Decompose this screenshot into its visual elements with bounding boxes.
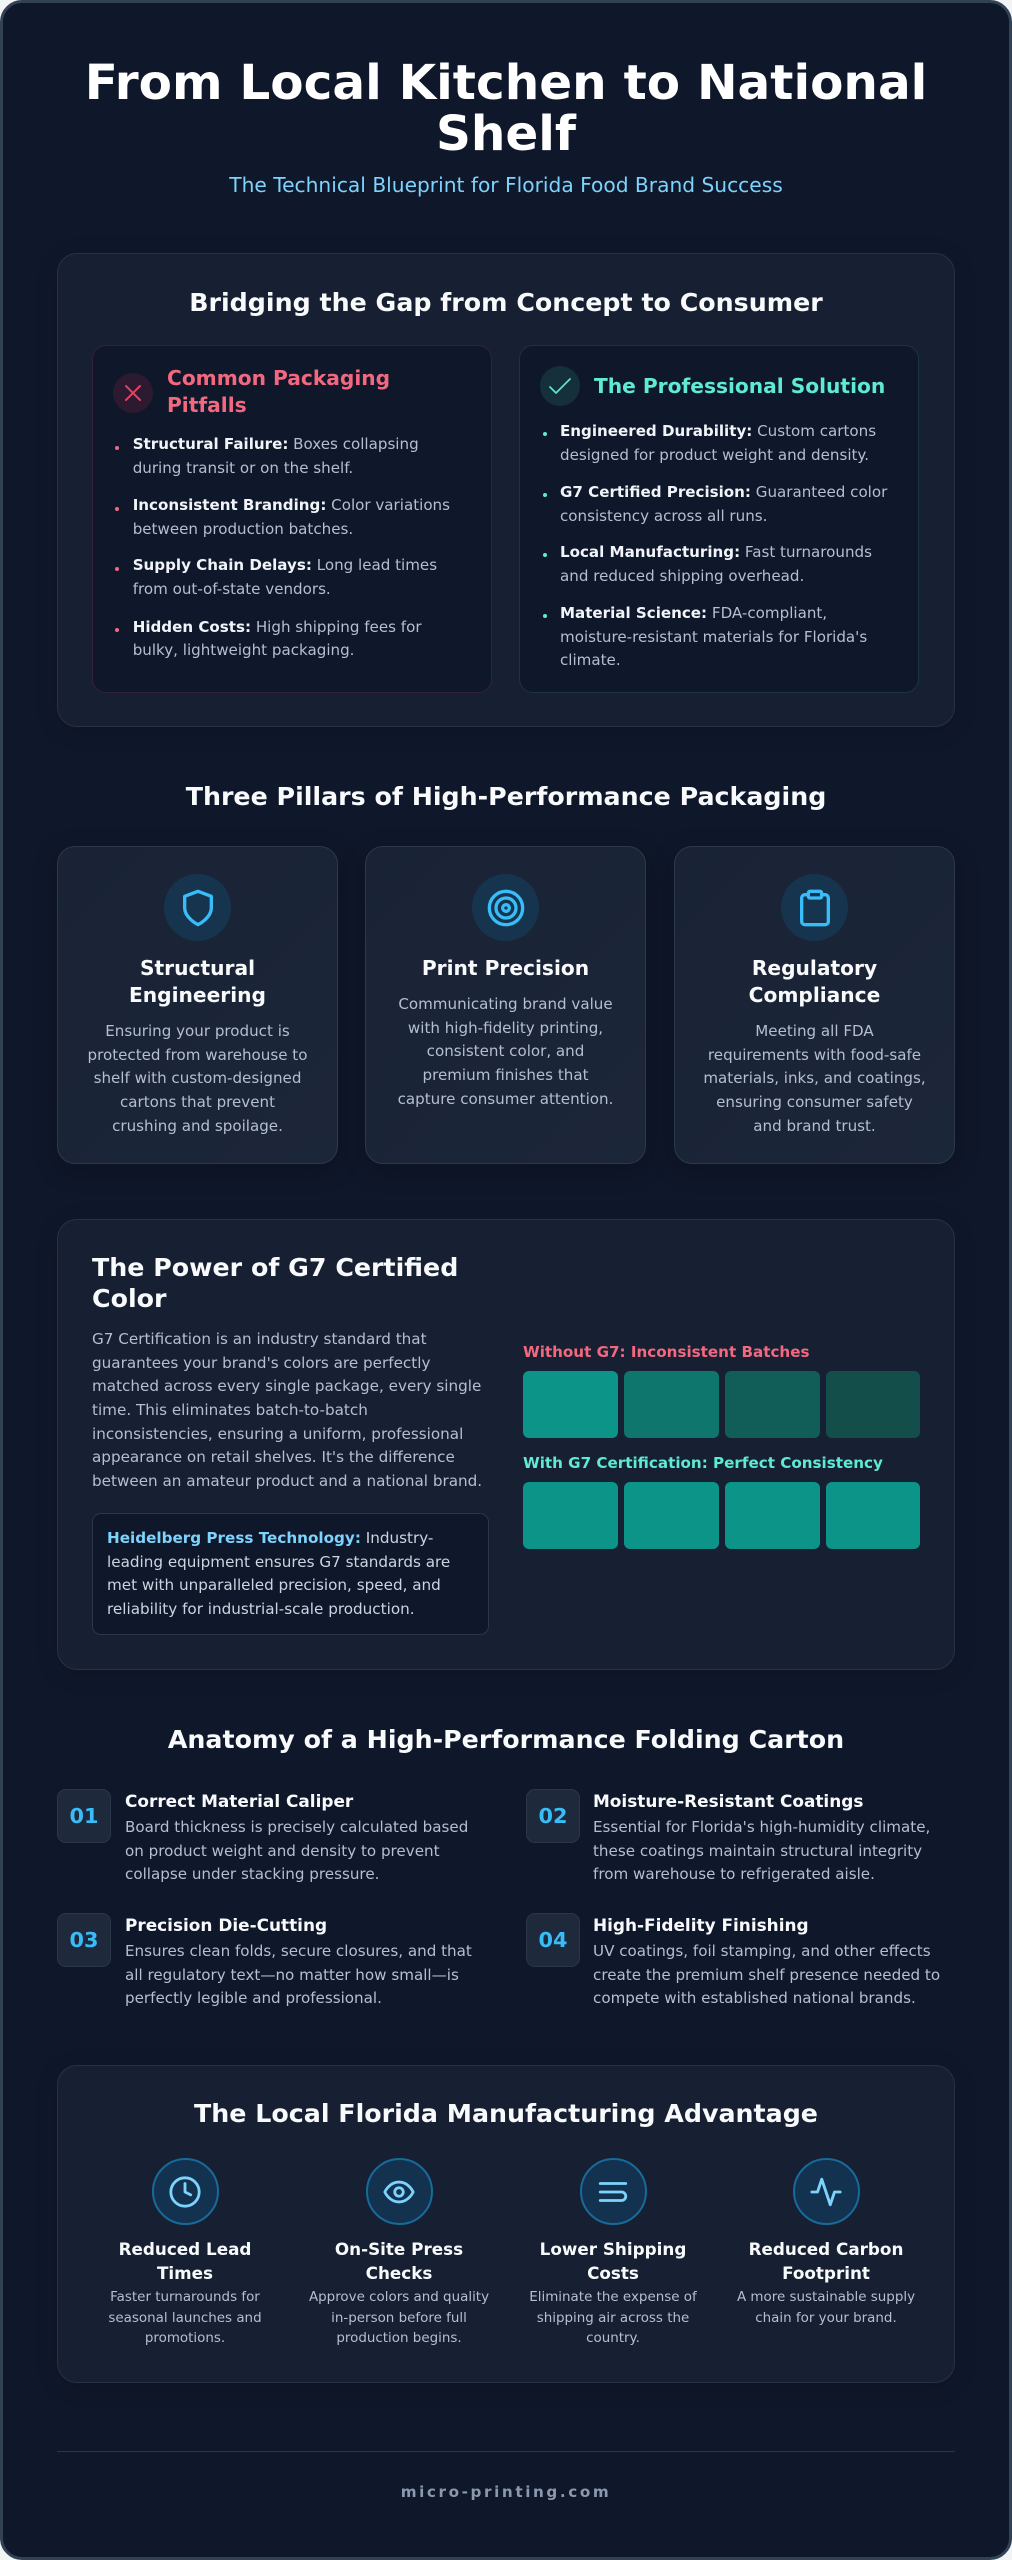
step text: these coatings maintain structural integrity <box>593 1842 922 1860</box>
step text: compete with established national brands. <box>593 1989 916 2007</box>
card text: protected from warehouse to <box>88 1046 307 1064</box>
step text: Essential for Florida's high-humidity climate, <box>593 1818 930 1836</box>
benefit text: chain for your brand. <box>755 2311 897 2326</box>
benefit: shipping costs <box>529 2158 697 2346</box>
heading: solution: The Professional Solution <box>594 374 885 398</box>
step title: High-Fidelity Finishing <box>593 1915 809 1935</box>
heading: g7 <box>92 1253 458 1313</box>
benefit text: Eliminate the expense of <box>529 2290 697 2305</box>
list item: g7 certified precision: consistency across all runs. <box>560 507 767 525</box>
heading: pitfalls <box>167 366 390 417</box>
number badge: 01 <box>70 1804 98 1828</box>
text: g7 description: matched across every single package, every single <box>92 1377 481 1395</box>
number badge: 04 <box>539 1928 567 1952</box>
card text: with high-fidelity printing, <box>408 1019 603 1037</box>
card title <box>129 956 266 1006</box>
list item: structural failure: Structural Failure: Boxes collapsing <box>133 435 419 453</box>
step 03 <box>57 1913 472 2007</box>
benefit title: On-Site Press <box>335 2239 463 2259</box>
benefit title: Costs <box>587 2263 639 2283</box>
title: From Local Kitchen to National <box>85 55 927 111</box>
callout: heidelberg press <box>92 1513 489 1635</box>
panel: florida advantage <box>57 2065 955 2383</box>
list item: g7 certified precision: G7 Certified Precision: Guaranteed color <box>560 483 887 501</box>
benefit title: Footprint <box>782 2263 870 2283</box>
panel: professional solution <box>519 345 919 693</box>
step title: Moisture-Resistant Coatings <box>593 1791 863 1811</box>
benefit title: Reduced Lead <box>119 2239 251 2259</box>
benefit text: country. <box>586 2331 640 2346</box>
number badge <box>526 1789 580 1843</box>
list item: hidden costs: Hidden Costs: High shipping fees for <box>133 618 422 636</box>
number badge <box>526 1913 580 1967</box>
benefit text: shipping air across the <box>537 2311 689 2326</box>
step text <box>125 1942 472 2007</box>
card text <box>703 1022 926 1135</box>
number badge <box>57 1789 111 1843</box>
benefit title: Times <box>157 2263 213 2283</box>
list item: material science: moisture-resistant materials for Florida's <box>560 628 867 646</box>
list item: material science: climate. <box>560 651 621 669</box>
card text: ensuring consumer safety <box>716 1093 913 1111</box>
list item: structural failure <box>115 435 419 477</box>
icon: x mark <box>113 373 153 413</box>
heading: pitfalls: Pitfalls <box>167 393 247 417</box>
card: structural engineering <box>57 846 338 1164</box>
list item: supply chain delays: Supply Chain Delays: Long lead times <box>133 556 437 574</box>
card text: capture consumer attention. <box>398 1090 613 1108</box>
step 04 <box>526 1913 940 2007</box>
benefit text: in-person before full <box>331 2311 467 2326</box>
list item: engineered durability <box>543 422 876 464</box>
card title: Structural <box>140 956 255 980</box>
card text <box>88 1022 307 1135</box>
swatches: consistent <box>523 1482 920 1549</box>
card text: consistent color, and <box>427 1042 584 1060</box>
card text: premium finishes that <box>422 1066 588 1084</box>
step text <box>593 1942 940 2007</box>
icon: activity <box>792 2158 860 2225</box>
text: g7 description: G7 Certification is an industry standard that <box>92 1330 427 1348</box>
list item: hidden costs <box>115 618 422 659</box>
panel: common packaging pitfalls <box>92 345 492 693</box>
text: g7 description: guarantees your brand's colors are perfectly <box>92 1354 430 1372</box>
heading: g7: The Power of G7 Certified <box>92 1253 458 1282</box>
step 02 <box>526 1789 930 1883</box>
footer: micro-printing.com <box>401 2483 611 2501</box>
benefit title <box>540 2239 686 2283</box>
benefit title: Lower Shipping <box>540 2239 686 2259</box>
step text: perfectly legible and professional. <box>125 1989 382 2007</box>
card text: requirements with food-safe <box>708 1046 921 1064</box>
callout text <box>107 1529 450 1618</box>
text: g7 description: time. This eliminates batch-to-batch <box>92 1401 368 1419</box>
list item: material science: Material Science: FDA-compliant, <box>560 604 827 622</box>
card title: Compliance <box>749 982 880 1006</box>
callout text: reliability for industrial-scale production. <box>107 1600 415 1618</box>
card text: Meeting all FDA <box>755 1022 874 1040</box>
list item: hidden costs: bulky, lightweight packaging. <box>133 641 354 659</box>
step text: collapse under stacking pressure. <box>125 1865 379 1883</box>
benefit text <box>108 2290 262 2346</box>
list item: structural failure: during transit or on the shelf. <box>133 459 353 477</box>
step text: Board thickness is precisely calculated based <box>125 1818 468 1836</box>
benefit text <box>309 2290 489 2346</box>
title: Shelf <box>436 106 576 162</box>
card text: Communicating brand value <box>398 995 613 1013</box>
heading: pitfalls: Common Packaging <box>167 366 390 390</box>
icon: eye <box>366 2158 432 2225</box>
icon: shipping lines <box>580 2158 646 2225</box>
step text: from warehouse to refrigerated aisle. <box>593 1865 875 1883</box>
benefit title <box>119 2239 251 2283</box>
list item: engineered durability: Engineered Durability: Custom cartons <box>560 422 876 440</box>
card text: Ensuring your product is <box>105 1022 290 1040</box>
heading: advantage: The Local Florida Manufacturing Advantage <box>194 2099 818 2128</box>
card title: Print Precision <box>422 956 589 980</box>
list item: material science <box>543 604 867 669</box>
card title: Regulatory <box>752 956 877 980</box>
list item: supply chain delays <box>115 556 437 598</box>
heading: g7: Color <box>92 1284 166 1313</box>
step text <box>593 1818 930 1883</box>
heading: three pillars: Three Pillars of High-Performance Packaging <box>186 782 826 811</box>
callout text: leading equipment ensures G7 standards are <box>107 1553 450 1571</box>
heading: anatomy: Anatomy of a High-Performance Folding Carton <box>168 1725 844 1754</box>
card text <box>398 995 613 1108</box>
benefit text: Faster turnarounds for <box>110 2290 260 2305</box>
list item: supply chain delays: from out-of-state vendors. <box>133 580 331 598</box>
benefit title: Checks <box>366 2263 432 2283</box>
card text: cartons that prevent <box>120 1093 275 1111</box>
callout text: met with unparalleled precision, speed, and <box>107 1576 441 1594</box>
benefit text: promotions. <box>145 2331 225 2346</box>
subtitle: The Technical Blueprint for Florida Food Brand Success <box>229 173 783 197</box>
card text: crushing and spoilage. <box>112 1117 283 1135</box>
card title <box>749 956 880 1006</box>
card text: shelf with custom-designed <box>94 1069 301 1087</box>
benefit text <box>737 2290 915 2326</box>
card text: materials, inks, and coatings, <box>703 1069 926 1087</box>
step title: Precision Die-Cutting <box>125 1915 327 1935</box>
list item: g7 certified precision <box>543 483 888 525</box>
number badge <box>57 1913 111 1967</box>
title <box>85 55 927 162</box>
list item: engineered durability: designed for product weight and density. <box>560 446 869 464</box>
benefit text: seasonal launches and <box>108 2311 262 2326</box>
icon: clipboard <box>781 874 848 941</box>
list item: inconsistent branding: Inconsistent Branding: Color variations <box>133 496 450 514</box>
number badge: 02 <box>539 1804 567 1828</box>
icon: check mark <box>540 366 580 406</box>
step text: UV coatings, foil stamping, and other effects <box>593 1942 931 1960</box>
text: g7 description: appearance on retail shelves. It's the difference <box>92 1448 455 1466</box>
card: print precision <box>365 846 646 1164</box>
benefit title <box>335 2239 463 2283</box>
icon: shield <box>164 874 231 941</box>
text: g7 description: inconsistencies, ensuring a uniform, professional <box>92 1425 463 1443</box>
number badge: 03 <box>70 1928 98 1952</box>
card text: and brand trust. <box>753 1117 876 1135</box>
text: g7 description: between an amateur product and a national brand. <box>92 1472 482 1490</box>
step text: create the premium shelf presence needed to <box>593 1966 940 1984</box>
step 01 <box>57 1789 468 1883</box>
benefit text: production begins. <box>336 2331 462 2346</box>
card title: Engineering <box>129 982 266 1006</box>
list item: local manufacturing <box>543 543 872 585</box>
panel: g7 certified color <box>57 1219 955 1670</box>
panel: bridging the gap <box>57 253 955 727</box>
step text: Ensures clean folds, secure closures, and that <box>125 1942 472 1960</box>
text: g7 description <box>92 1330 482 1490</box>
step text <box>125 1818 468 1883</box>
list item: inconsistent branding <box>115 496 450 538</box>
step text: all regulatory text—no matter how small—is <box>125 1966 459 1984</box>
benefit text <box>529 2290 697 2346</box>
swatches: inconsistent <box>523 1371 920 1438</box>
step title: Correct Material Caliper <box>125 1791 353 1811</box>
label: with g7: With G7 Certification: Perfect Consistency <box>523 1454 883 1472</box>
callout text: Heidelberg Press Technology: Industry- <box>107 1529 433 1547</box>
benefit text: Approve colors and quality <box>309 2290 489 2305</box>
benefit: lead times <box>108 2158 262 2346</box>
heading: bridging the gap: Bridging the Gap from Concept to Consumer <box>189 288 823 316</box>
benefit text: A more sustainable supply <box>737 2290 915 2305</box>
icon: clock <box>152 2158 218 2225</box>
label: without g7: Without G7: Inconsistent Batches <box>523 1343 810 1361</box>
benefit title: Reduced Carbon <box>749 2239 903 2259</box>
benefit: press checks <box>309 2158 489 2346</box>
benefit: carbon footprint <box>737 2158 915 2326</box>
list item: local manufacturing: and reduced shipping overhead. <box>560 567 804 585</box>
list item: local manufacturing: Local Manufacturing: Fast turnarounds <box>560 543 872 561</box>
icon: target <box>472 874 539 941</box>
step text: on product weight and density to prevent <box>125 1842 440 1860</box>
list item: inconsistent branding: between production batches. <box>133 520 353 538</box>
benefit title <box>749 2239 903 2283</box>
card: regulatory compliance <box>674 846 955 1164</box>
